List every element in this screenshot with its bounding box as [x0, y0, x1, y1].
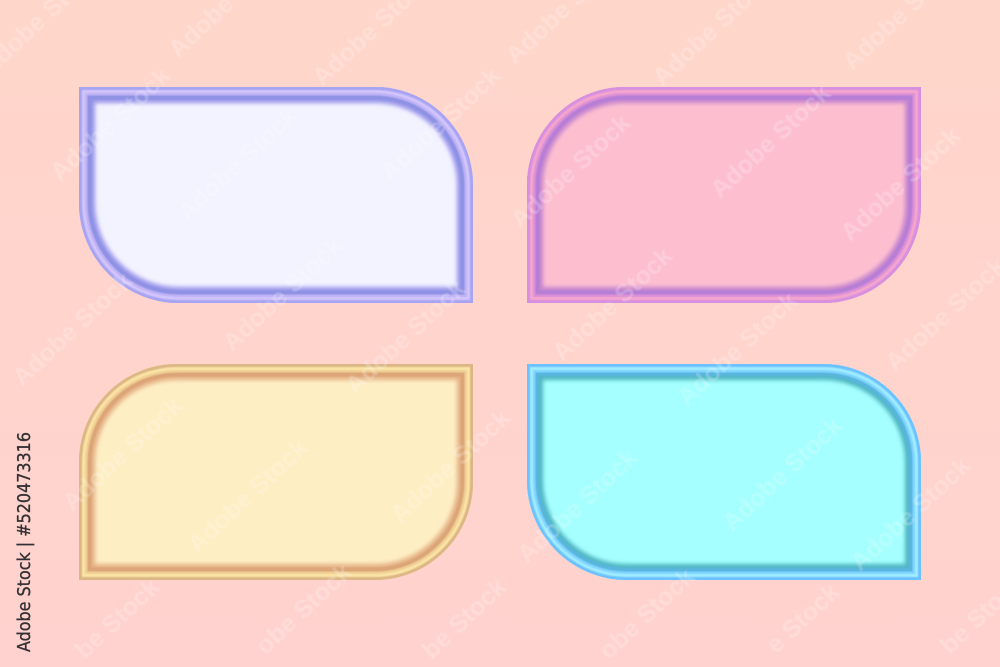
watermark pattern: obe Stock — [251, 558, 357, 660]
watermark pattern: Adobe Stock — [375, 62, 506, 186]
watermark pattern: Adobe Stock — [172, 102, 303, 226]
watermark pattern: e Stock — [761, 578, 845, 659]
watermark pattern: Adobe Stock — [340, 275, 471, 399]
panel: cream frame, bottom left — [79, 364, 473, 580]
panel: lavender frame, top left — [79, 87, 473, 303]
watermark pattern: Adobe Stock — [835, 122, 966, 246]
watermark pattern: Adobe Stock — [505, 109, 636, 233]
watermark pattern: Adobe Stock — [705, 79, 836, 203]
watermark pattern: Adobe Stock — [672, 287, 803, 411]
watermark pattern: Adobe Stock — [57, 392, 188, 516]
panel: aqua frame, bottom right — [527, 364, 921, 580]
watermark pattern: Adobe Stock — [182, 434, 313, 558]
watermark pattern: Adobe Stock — [547, 242, 678, 366]
watermark pattern: Adobe Stock — [45, 62, 176, 186]
watermark pattern: Adobe Stock — [717, 412, 848, 536]
watermark pattern: Adobe Stock — [845, 452, 976, 576]
watermark pattern: be Stock — [70, 573, 165, 664]
watermark pattern: Adobe Stock — [385, 404, 516, 528]
watermark pattern: Adobe Stock — [217, 232, 348, 356]
watermark pattern: obe Stock — [594, 563, 700, 665]
panel: pink frame, top right — [527, 87, 921, 303]
watermark pattern: be Stock — [417, 573, 512, 664]
watermark pattern: Adobe Stock — [512, 444, 643, 568]
watermark pattern: Adobe Stock — [7, 267, 138, 391]
vertical stock id text: Adobe Stock | #520473316 — [15, 432, 35, 652]
